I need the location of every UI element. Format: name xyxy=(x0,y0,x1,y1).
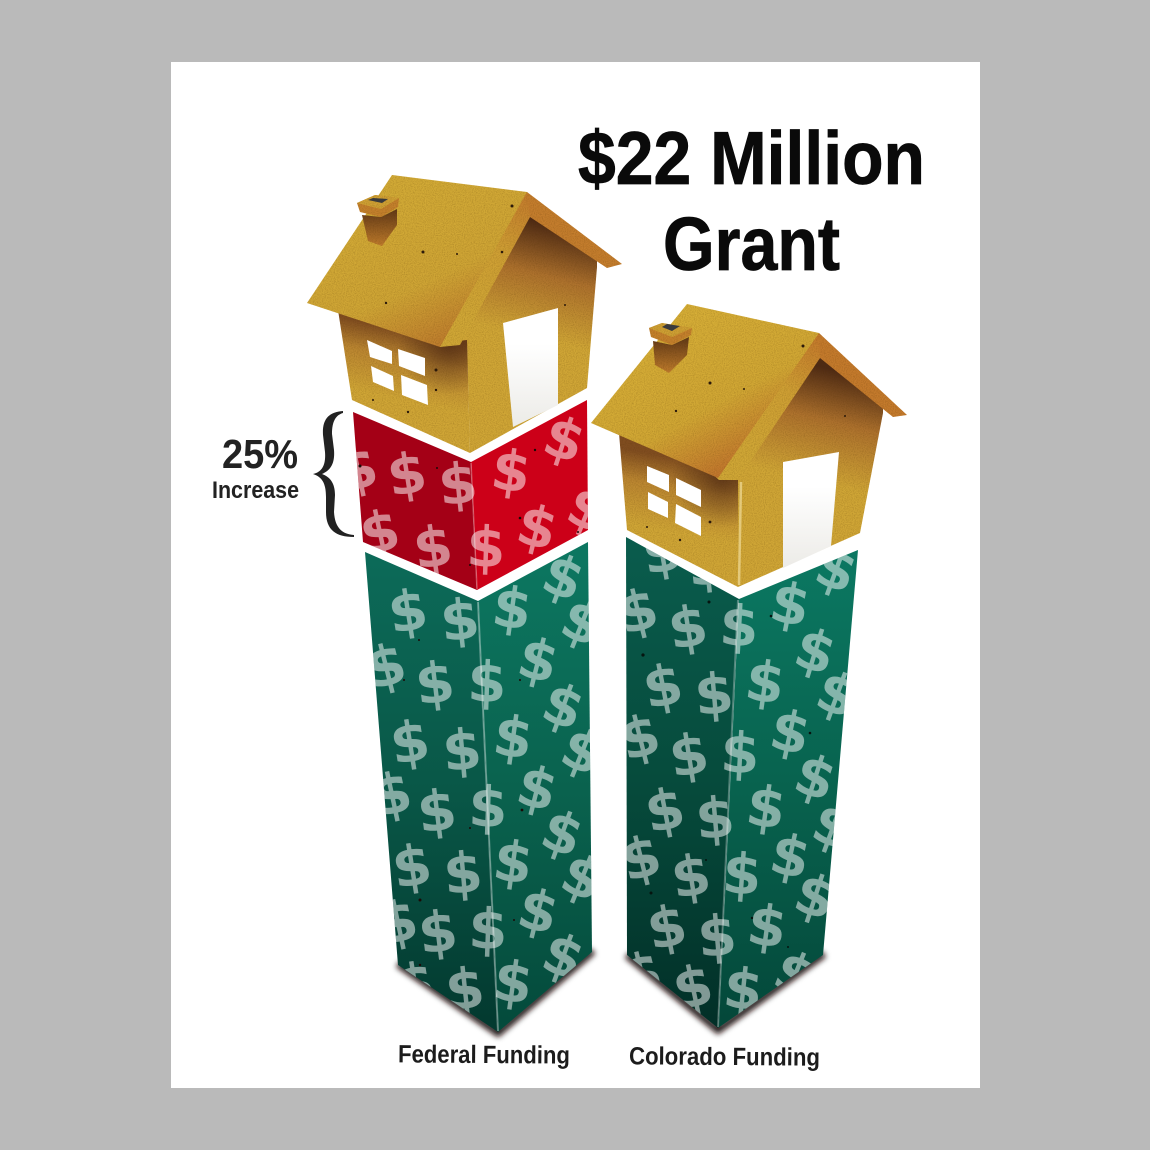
dollar pattern green: $ xyxy=(642,892,692,964)
dollar pattern green: $ xyxy=(742,773,790,843)
dollar pattern green xyxy=(626,548,854,1014)
dollar pattern green: $ xyxy=(552,841,612,915)
dollar pattern green: $ xyxy=(359,631,413,703)
dollar pattern green: $ xyxy=(511,625,565,697)
title: Grant xyxy=(663,202,840,286)
dollar pattern green: $ xyxy=(667,952,719,1024)
dollar pattern green: $ xyxy=(614,823,668,895)
roof eave xyxy=(812,333,907,417)
dollar pattern red: $ xyxy=(487,437,535,507)
dollar pattern green: $ xyxy=(415,898,461,968)
dollar pattern green: $ xyxy=(613,702,667,774)
dollar pattern green: $ xyxy=(552,715,612,789)
dollar pattern green: $ xyxy=(552,586,612,660)
dollar pattern red: $ xyxy=(383,440,431,510)
dollar pattern red: $ xyxy=(332,434,384,506)
chimney body xyxy=(653,337,689,373)
dollar pattern green: $ xyxy=(764,697,816,769)
dollar pattern green: $ xyxy=(510,753,564,825)
dollar pattern green: $ xyxy=(534,670,592,744)
dollar pattern red: $ xyxy=(409,513,457,583)
callout: 25% increase: 25% xyxy=(222,431,298,477)
white poster panel xyxy=(171,62,980,1088)
dollar pattern red: $ xyxy=(354,497,406,569)
dollar pattern green: $ xyxy=(693,785,737,853)
dollar pattern green: $ xyxy=(391,950,439,1020)
house body xyxy=(591,304,907,587)
dollar pattern green: $ xyxy=(665,721,713,791)
house: federal xyxy=(307,175,622,453)
dollar pattern green: $ xyxy=(684,532,730,600)
corner highlight xyxy=(739,482,741,585)
red increase left face xyxy=(353,412,477,590)
dollar pattern green: $ xyxy=(466,650,508,716)
dollar pattern green: $ xyxy=(440,717,484,785)
column base shadow xyxy=(627,954,824,1030)
dollar pattern green: $ xyxy=(388,832,436,902)
column: colorado funding xyxy=(611,518,866,1030)
dollar pattern green: $ xyxy=(764,821,816,893)
red increase right face xyxy=(471,400,588,590)
dollar pattern green: $ xyxy=(489,948,537,1018)
label: colorado funding: Colorado Funding xyxy=(629,1042,820,1072)
dollar pattern green: $ xyxy=(437,587,483,655)
column base shadow xyxy=(398,951,593,1033)
door xyxy=(783,452,839,568)
window xyxy=(647,466,701,536)
dollar pattern green: $ xyxy=(695,903,739,971)
dollar pattern green: $ xyxy=(765,938,825,1012)
dollar pattern green: $ xyxy=(765,569,815,641)
dollar pattern green: $ xyxy=(534,541,592,615)
dollar pattern red: $ xyxy=(510,492,564,564)
dollar pattern green: $ xyxy=(720,956,766,1024)
dollar pattern green: $ xyxy=(467,775,509,841)
callout: 25% increase: Increase xyxy=(212,477,299,504)
dollar pattern green: $ xyxy=(807,533,865,607)
chimney cap xyxy=(649,323,692,345)
dollar pattern green: $ xyxy=(638,651,688,723)
title: $22 Million xyxy=(578,116,925,200)
dollar pattern green: $ xyxy=(664,593,712,663)
chimney opening xyxy=(662,324,680,331)
dollar pattern green: $ xyxy=(743,892,791,962)
window xyxy=(367,340,428,405)
roof eave xyxy=(520,192,622,268)
dollar pattern green: $ xyxy=(488,574,536,644)
callout: 25% increase xyxy=(212,431,299,504)
right green face xyxy=(478,542,592,1032)
dollar pattern green: $ xyxy=(720,841,764,909)
dollar pattern green: $ xyxy=(489,828,537,898)
dollar pattern green: $ xyxy=(442,956,488,1024)
roof plane xyxy=(307,175,527,347)
dollar pattern green: $ xyxy=(786,741,844,815)
dollar pattern green: $ xyxy=(615,939,669,1011)
dollar pattern green: $ xyxy=(384,577,432,647)
dollar pattern green: $ xyxy=(640,775,690,847)
dollar pattern green: $ xyxy=(533,797,591,871)
dollar pattern green: $ xyxy=(511,876,565,948)
dollar pattern red: $ xyxy=(535,403,593,477)
dollar pattern green: $ xyxy=(637,518,687,588)
dollar pattern green: $ xyxy=(787,615,843,689)
dollar pattern green: $ xyxy=(741,648,789,718)
dollar pattern green: $ xyxy=(786,860,844,934)
dollar pattern red: $ xyxy=(435,451,481,519)
dollar pattern green: $ xyxy=(412,649,458,719)
chimney cap xyxy=(357,195,399,217)
dollar pattern green: $ xyxy=(441,840,485,908)
door xyxy=(503,308,558,427)
dollar pattern green: $ xyxy=(692,661,736,729)
dollar pattern green: $ xyxy=(372,887,424,959)
specks xyxy=(358,449,579,966)
specks xyxy=(641,600,811,948)
column: federal funding xyxy=(353,400,599,1041)
dollar pattern green: $ xyxy=(534,920,592,994)
dollar pattern green: $ xyxy=(386,708,434,778)
left wall xyxy=(619,433,738,587)
right wall xyxy=(455,210,597,453)
title xyxy=(578,116,925,286)
chimney body xyxy=(362,209,397,246)
dollar pattern green: $ xyxy=(467,897,509,963)
right wall xyxy=(738,350,883,587)
left wall xyxy=(338,310,470,453)
dollar pattern green: $ xyxy=(366,759,418,831)
dollar pattern green: $ xyxy=(489,703,537,773)
dollar pattern green xyxy=(373,554,592,1013)
left green face xyxy=(365,552,498,1032)
specks xyxy=(646,344,846,541)
dollar pattern green: $ xyxy=(718,594,760,660)
specks xyxy=(372,204,566,413)
house body xyxy=(307,175,622,453)
bracket: increase brace xyxy=(313,411,354,537)
left green face xyxy=(626,537,739,1028)
dollar pattern green: $ xyxy=(667,842,715,912)
right green face xyxy=(718,550,858,1028)
dollar pattern green: $ xyxy=(414,777,460,847)
dollar pattern red: $ xyxy=(558,473,618,547)
dollar pattern green: $ xyxy=(611,576,665,648)
dollar pattern green: $ xyxy=(808,658,866,732)
chimney opening xyxy=(368,198,388,203)
dollar pattern red xyxy=(356,416,588,575)
roof plane xyxy=(591,304,819,478)
dollar pattern green: $ xyxy=(804,790,862,864)
dollar pattern red: $ xyxy=(465,515,507,581)
house: colorado xyxy=(591,304,907,587)
label: federal funding: Federal Funding xyxy=(398,1040,570,1070)
dollar pattern green: $ xyxy=(719,721,761,787)
